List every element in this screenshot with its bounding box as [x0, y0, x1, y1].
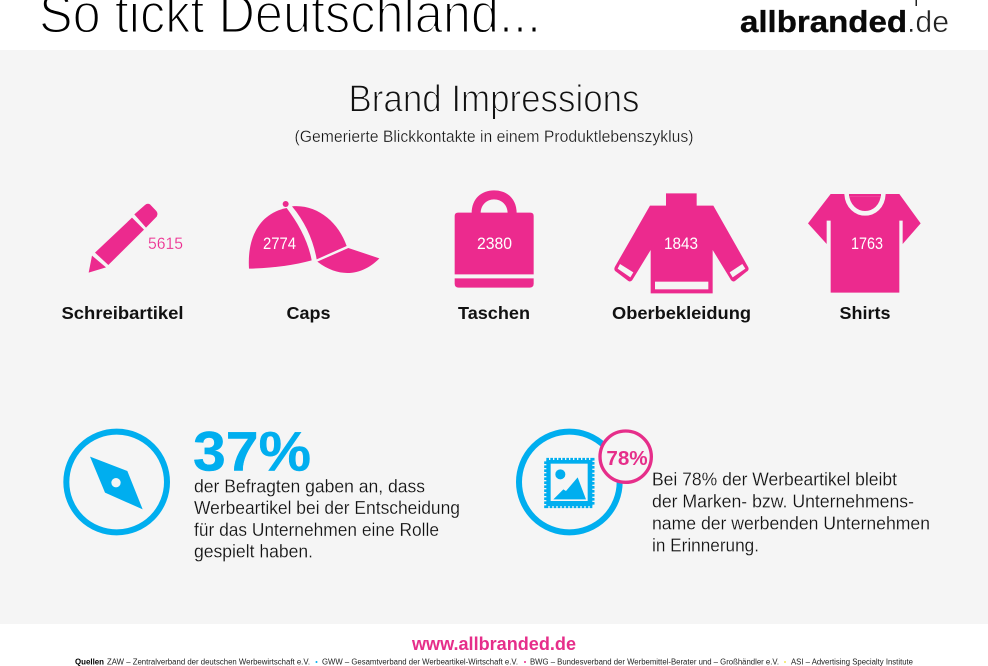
- text block: 37% description: Werbeartikel bei der Entscheidung: [194, 498, 460, 518]
- icon: pencil: [89, 204, 157, 273]
- footer sources: [75, 658, 914, 666]
- text block: 37% description: der Befragten gaben an, dass: [194, 476, 425, 496]
- icon: picture stamp with 78% badge: [519, 431, 651, 532]
- icon: cap: [249, 201, 379, 273]
- item: Schreibartikel: [62, 204, 184, 323]
- badge: 78%: [606, 448, 648, 470]
- footer url: www.allbranded.de: [411, 634, 576, 654]
- label: Taschen: [458, 303, 530, 323]
- value: 5615: [148, 235, 183, 253]
- text block: 78% description: der Marken- bzw. Unternehmens-: [652, 492, 914, 512]
- label: Schreibartikel: [62, 303, 184, 323]
- text block: 78% description: Bei 78% der Werbeartikel bleibt: [652, 470, 897, 490]
- heading: Brand Impressions: [348, 79, 640, 121]
- statistic: 37%: 37%: [193, 420, 311, 482]
- icon: compass: [66, 432, 167, 532]
- text block: 37% description: gespielt haben.: [194, 542, 313, 562]
- value: 1843: [664, 235, 698, 253]
- text block: 78% description: name der werbenden Unternehmen: [652, 514, 930, 534]
- label: Caps: [286, 303, 331, 323]
- logo: allbranded: [740, 5, 907, 39]
- icon: t-shirt: [808, 191, 921, 293]
- logo: [740, 0, 949, 39]
- value: 2380: [477, 235, 512, 253]
- subheading: (Gemerierte Blickkontakte in einem Produktlebenszyklus): [294, 127, 694, 146]
- item: Shirts: [808, 191, 921, 323]
- icon: sweater: [614, 193, 749, 293]
- text block: 78% description: [652, 470, 930, 556]
- text block: 37% description: für das Unternehmen eine Rolle: [194, 520, 439, 540]
- icon: bag: [455, 190, 534, 288]
- label: Shirts: [840, 303, 891, 323]
- value: 1763: [851, 235, 883, 253]
- text block: 37% description: [194, 476, 460, 562]
- item: Oberbekleidung: [612, 193, 751, 323]
- item: Taschen: [455, 190, 534, 323]
- item: Caps: [249, 201, 379, 323]
- logo: .de: [907, 5, 949, 39]
- value: 2774: [263, 235, 296, 253]
- label: Oberbekleidung: [612, 303, 751, 323]
- text block: 78% description: in Erinnerung.: [652, 536, 759, 556]
